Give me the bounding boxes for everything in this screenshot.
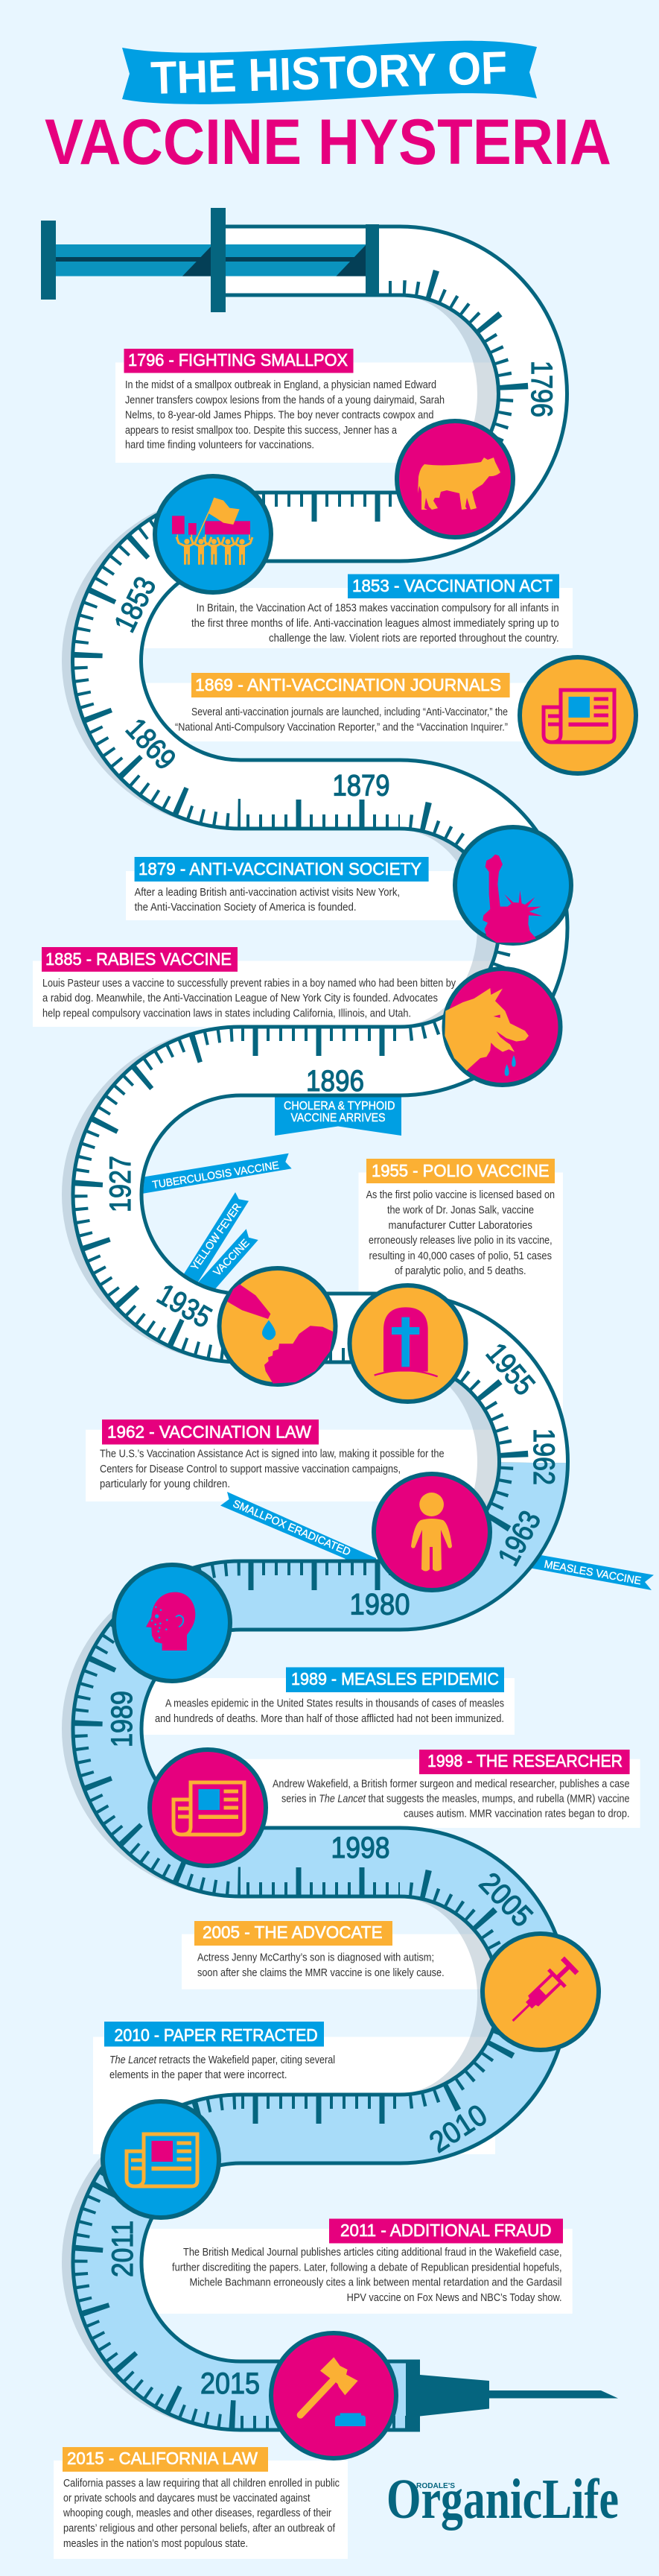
text: 1796 body: Jenner transfers cowpox lesions from the hands of a young dairymaid, Sarah <box>125 393 445 406</box>
ribbon: cholera and typhoid: CHOLERA & TYPHOID <box>284 1100 395 1113</box>
year labels: 2015 <box>200 2367 260 2400</box>
year labels: 1879 <box>332 769 390 802</box>
title <box>45 41 611 178</box>
text: 1853 body: challenge the law. Violent riots are reported throughout the country. <box>269 632 559 645</box>
text: 2015 body: measles in the nation’s most populous state. <box>63 2537 248 2550</box>
heading: 1853: 1853 - VACCINATION ACT <box>352 576 553 595</box>
ribbon: smallpox eradicated <box>220 1492 376 1565</box>
scale tick marks <box>81 279 514 2422</box>
panel: 1989 measles epidemic <box>138 1668 515 1735</box>
year labels: 1963 <box>492 1506 547 1571</box>
icon: rabid dog <box>444 969 560 1085</box>
text: 1885 body: a rabid dog. Meanwhile, the Anti-Vaccination League of New York City is founded. Advocates <box>42 992 438 1004</box>
icon: newspaper blue <box>103 2101 219 2218</box>
year labels: 1980 <box>350 1589 410 1621</box>
year labels: 1962 <box>527 1428 560 1485</box>
panel: 2015 california law <box>54 2447 348 2559</box>
text: 1962 body: Centers for Disease Control to support massive vaccination campaigns, <box>100 1463 401 1475</box>
heading: 2005: 2005 - THE ADVOCATE <box>203 1922 383 1942</box>
text: 1796 body: Nelms, to 8-year-old James Phipps. The boy never contracts cowpox and <box>125 409 433 422</box>
text: 1853 body: In Britain, the Vaccination Act of 1853 makes vaccination compulsory for all infants in <box>197 602 559 614</box>
title main line: VACCINE HYSTERIA <box>45 107 611 178</box>
text: 1796 body: In the midst of a smallpox outbreak in England, a physician named Edward <box>125 379 436 391</box>
text: 1869 body <box>175 706 508 734</box>
text: 1869 body: Several anti-vaccination journals are launched, including “Anti-Vaccinator,” the <box>191 706 508 718</box>
heading: 2010: 2010 - PAPER RETRACTED <box>115 2025 318 2045</box>
heading: 1989: 1989 - MEASLES EPIDEMIC <box>291 1669 499 1689</box>
icon: measles head <box>114 1565 230 1681</box>
year labels: 2005 <box>473 1867 539 1933</box>
text: 1853 body: the first three months of life. Anti-vaccination leagues almost immediately spring up to <box>191 617 559 630</box>
ribbon: measles vaccine: MEASLES VACCINE <box>543 1559 643 1587</box>
text: 1796 body: appears to resist smallpox too. Despite this success, Jenner has a <box>125 424 398 437</box>
ribbon: yellow fever: YELLOW FEVER <box>189 1201 244 1273</box>
icon: cow <box>397 421 513 537</box>
icon: statue of liberty <box>455 827 571 943</box>
text: 1879 body: the Anti-Vaccination Society of America is founded. <box>135 901 357 914</box>
text: 1962 body <box>100 1448 445 1490</box>
heading: 1998: 1998 - THE RESEARCHER <box>427 1751 623 1770</box>
text: 1955 body: of paralytic polio, and 5 deaths. <box>395 1265 526 1277</box>
text: 1989 body <box>155 1697 504 1725</box>
text: 2015 body <box>63 2477 340 2550</box>
icon: gavel <box>271 2333 396 2458</box>
syringe needle and hub <box>406 2360 618 2431</box>
year labels: 1998 <box>331 1832 390 1864</box>
text: 1796 body <box>125 379 445 452</box>
panel: 1962 vaccination law <box>86 1420 499 1501</box>
year labels: 1935 <box>152 1278 217 1335</box>
panel: 1853 vaccination act <box>134 574 573 648</box>
heading: 1955: 1955 - POLIO VACCINE <box>372 1161 550 1180</box>
text: 1955 body: resulting in 40,000 cases of polio, 51 cases <box>369 1250 552 1262</box>
text: 1869 body: “National Anti-Compulsory Vaccination Reporter,” and the “Vaccination Inquirer.” <box>175 721 508 734</box>
heading: 1879: 1879 - ANTI-VACCINATION SOCIETY <box>139 859 421 879</box>
ribbon: tuberculosis vaccine: TUBERCULOSIS VACCINE <box>151 1159 280 1192</box>
text: 2005 body: Actress Jenny McCarthy’s son is diagnosed with autism; <box>197 1951 434 1964</box>
panel: 2005 the advocate <box>182 1921 506 1990</box>
logo: Rodale's Organic Life: RODALE'S <box>416 2482 455 2490</box>
icon: newspaper pink <box>150 1750 266 1866</box>
text: 2015 body: California passes a law requiring that all children enrolled in public <box>63 2477 340 2490</box>
text: 1955 body: As the first polio vaccine is licensed based on <box>366 1189 555 1201</box>
panel: 2011 additional fraud <box>138 2219 573 2314</box>
panel: 1998 the researcher <box>223 1750 640 1828</box>
heading: 1796: 1796 - FIGHTING SMALLPOX <box>128 350 348 370</box>
text: 1955 body <box>366 1189 555 1277</box>
icon: newspaper orange <box>520 657 636 773</box>
icon: child <box>374 1474 490 1590</box>
text: 2011 body: HPV vaccine on Fox News and NBC’s Today show. <box>347 2291 562 2304</box>
year labels: 1927 <box>104 1156 137 1212</box>
title banner: THE HISTORY OF <box>150 42 508 104</box>
text: 1885 body: Louis Pasteur uses a vaccine to successfully prevent rabies in a boy named who had been bitten by <box>42 977 456 990</box>
text: 1796 body: hard time finding volunteers for vaccinations. <box>125 438 314 452</box>
year labels: 2011 <box>106 2221 139 2277</box>
text: 2011 body: Michele Bachmann erroneously cites a link between mental retardation and the Gardasil <box>189 2276 561 2289</box>
text: 2015 body: or private schools and daycares must be vaccinated against <box>63 2492 311 2504</box>
text: 2011 body: further discrediting the papers. Later, following a debate of Republican presidential hopefuls, <box>172 2261 562 2274</box>
year labels: 1869 <box>119 712 182 776</box>
text: 1955 body: manufacturer Cutter Laboratories <box>389 1219 532 1232</box>
heading: 2015: 2015 - CALIFORNIA LAW <box>67 2449 258 2468</box>
year labels: 1955 <box>480 1337 541 1402</box>
icon: protesters <box>155 476 271 592</box>
text: 2015 body: whooping cough, measles and other diseases, regardless of their <box>63 2507 331 2519</box>
ribbon: cholera and typhoid <box>275 1092 401 1136</box>
panel: 1879 anti-vaccination society <box>126 857 484 920</box>
text: 1879 body <box>135 886 400 914</box>
text: 1885 body <box>42 977 456 1020</box>
panel: 2010 paper retracted <box>93 2022 495 2154</box>
icon: vaccine drop <box>219 1268 335 1384</box>
text: 2010 body <box>109 2054 335 2081</box>
panel: 1796 fighting smallpox <box>115 349 506 463</box>
year labels: 2010 <box>424 2098 493 2159</box>
text: 1989 body: and hundreds of deaths. More than half of those afflicted had not been immunized. <box>155 1712 504 1725</box>
ribbon: measles vaccine <box>525 1554 654 1590</box>
year labels: 1989 <box>106 1691 139 1747</box>
text: 1962 body: particularly for young children. <box>100 1478 230 1490</box>
year labels: 1896 <box>306 1065 364 1098</box>
text: 2005 body <box>197 1951 445 1979</box>
tube shadows <box>62 297 497 2431</box>
ribbon: smallpox eradicated: SMALLPOX ERADICATED <box>231 1498 352 1558</box>
heading: 1962: 1962 - VACCINATION LAW <box>107 1422 311 1441</box>
text: 1885 body: help repeal compulsory vaccination laws in states including California, Illinois, and Utah. <box>42 1007 411 1020</box>
panel: 1955 polio vaccine <box>359 1159 563 1420</box>
text: 2011 body: The British Medical Journal publishes articles citing additional fraud in the Wakefield case, <box>183 2246 562 2259</box>
syringe plunger <box>41 208 379 312</box>
year labels: 1796 <box>525 361 558 417</box>
text: 1989 body: A measles epidemic in the United States results in thousands of cases of measles <box>165 1697 504 1709</box>
heading: 1885: 1885 - RABIES VACCINE <box>45 949 232 969</box>
text: 2015 body: parents’ religious and other personal beliefs, after an outbreak of <box>63 2522 336 2535</box>
year labels <box>104 361 560 2400</box>
panel: 1869 anti-vaccination journals <box>138 673 532 741</box>
text: 1879 body: After a leading British anti-vaccination activist visits New York, <box>135 886 400 899</box>
text: 2005 body: soon after she claims the MMR vaccine is one likely cause. <box>197 1966 445 1979</box>
text: 1962 body: The U.S.’s Vaccination Assistance Act is signed into law, making it possible for the <box>100 1448 445 1461</box>
text: 1853 body <box>191 602 559 645</box>
year labels: 1853 <box>108 572 162 637</box>
text: 1998 body <box>273 1777 630 1820</box>
text: 1955 body: the work of Dr. Jonas Salk, vaccine <box>387 1204 534 1217</box>
icon: gravestone <box>350 1285 466 1402</box>
heading: 1869: 1869 - ANTI-VACCINATION JOURNALS <box>195 675 501 694</box>
text: 2010 body: The Lancet retracts the Wakefield paper, citing several <box>109 2054 335 2066</box>
ribbon: cholera and typhoid: VACCINE ARRIVES <box>290 1112 386 1124</box>
icon: syringe <box>483 1934 599 2050</box>
heading: 2011: 2011 - ADDITIONAL FRAUD <box>340 2221 551 2240</box>
text: 1955 body: erroneously releases live polio in its vaccine, <box>369 1234 553 1247</box>
ribbon: yellow fever vaccine: VACCINE <box>211 1237 252 1279</box>
text: 2010 body: elements in the paper that were incorrect. <box>109 2069 287 2081</box>
text: 2011 body <box>172 2246 562 2304</box>
syringe tube body <box>107 261 534 2396</box>
panel: 1885 rabies vaccine <box>33 947 499 1027</box>
ribbon: yellow fever vaccine <box>198 1229 258 1290</box>
